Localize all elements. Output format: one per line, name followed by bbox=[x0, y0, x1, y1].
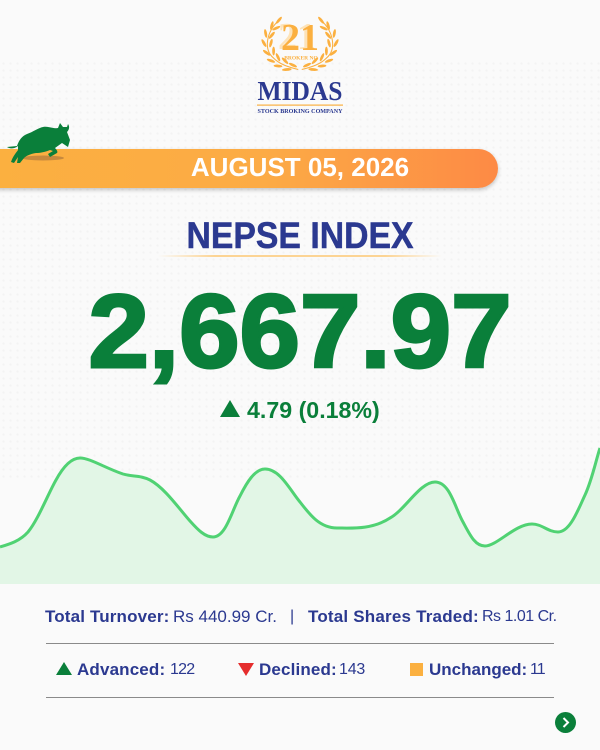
badge number 21: 21 bbox=[281, 17, 319, 59]
badge number 21: 21 bbox=[278, 16, 316, 58]
advanced count: 122 bbox=[170, 661, 194, 678]
date text: AUGUST 05, 2026 bbox=[191, 152, 409, 182]
icon: unchanged square bbox=[410, 663, 423, 676]
total turnover bbox=[45, 607, 277, 626]
area line chart bbox=[0, 448, 600, 584]
total turnover: Total Turnover: bbox=[45, 607, 169, 626]
breadth row bbox=[56, 660, 545, 679]
total shares traded: Total Shares Traded: bbox=[308, 607, 479, 626]
index value: 2,667.97 bbox=[88, 274, 512, 390]
index change bbox=[220, 397, 380, 423]
icon: declined triangle bbox=[238, 663, 254, 676]
MIDAS wordmark: MIDAS bbox=[258, 76, 342, 106]
icon: up triangle bbox=[220, 400, 240, 417]
separator: | bbox=[290, 608, 294, 625]
unchanged count: Unchanged: bbox=[429, 660, 527, 679]
advanced count: Advanced: bbox=[77, 660, 165, 679]
total shares traded bbox=[308, 607, 557, 626]
icon: green bull bbox=[7, 123, 70, 163]
total turnover: Rs 440.99 Cr. bbox=[173, 607, 277, 626]
icon: next arrow bbox=[555, 712, 576, 733]
total shares traded: Rs 1.01 Cr. bbox=[482, 608, 557, 625]
change text: 4.79 (0.18%) bbox=[247, 397, 380, 423]
broker no text: BROKER NO bbox=[284, 56, 318, 62]
icon: advanced triangle bbox=[56, 662, 72, 675]
company tagline: STOCK BROKING COMPANY bbox=[258, 108, 343, 115]
heading underline bbox=[158, 255, 442, 257]
date banner bbox=[0, 149, 498, 188]
declined count: Declined: bbox=[259, 660, 337, 679]
laurel wreath bbox=[261, 16, 339, 71]
declined count: 143 bbox=[339, 661, 365, 678]
logo: Midas stock broking bbox=[257, 16, 343, 115]
market totals row bbox=[45, 607, 557, 626]
heading: NEPSE INDEX bbox=[187, 214, 413, 256]
unchanged count: 11 bbox=[530, 661, 545, 678]
